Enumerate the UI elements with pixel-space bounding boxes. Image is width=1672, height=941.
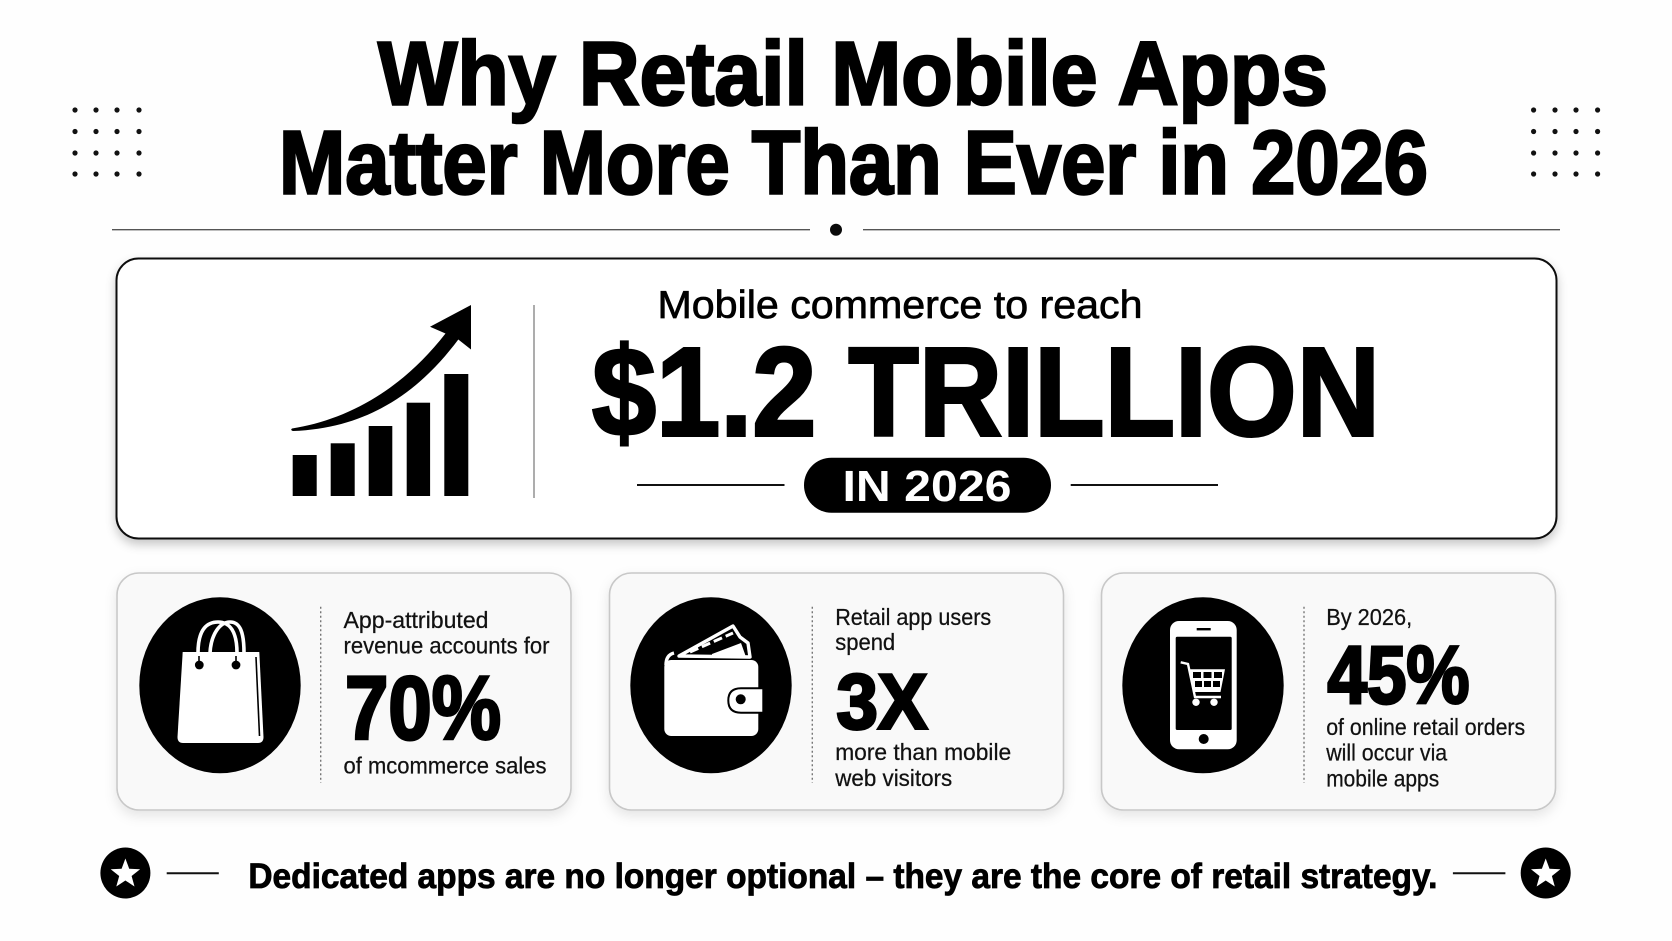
text: card 2 copy: 3X	[836, 658, 928, 746]
panel: share of online orders	[1102, 573, 1556, 810]
text: card 1 copy: 70%	[345, 659, 501, 759]
text: card 1 copy	[344, 607, 550, 778]
text: card 1 copy: App-attributed	[344, 607, 488, 633]
icon: growth bar chart with arrow	[291, 305, 471, 496]
text: mobile commerce to reach: Mobile commerce to reach	[658, 284, 1142, 327]
icon: shopping bag	[139, 597, 301, 773]
big number: $1.2 trillion: $1.2 TRILLION	[592, 322, 1380, 462]
icon: wallet	[630, 597, 792, 773]
panel: hero statistic	[116, 258, 1556, 538]
text: card 2 copy: Retail app users	[835, 604, 991, 630]
title: Why Retail Mobile Apps	[378, 24, 1328, 124]
text: card 2 copy: spend	[835, 629, 895, 655]
decorative dots: right	[1531, 107, 1600, 177]
text: card 3 copy: will occur via	[1325, 740, 1447, 766]
text: card 2 copy: web visitors	[834, 765, 952, 791]
text: card 1 copy: revenue accounts for	[344, 632, 550, 658]
decorative dots: left	[72, 107, 142, 177]
text: card 3 copy: mobile apps	[1326, 766, 1439, 792]
icon: right star badge	[1521, 848, 1571, 898]
text: card 2 copy	[834, 604, 1011, 791]
badge: in 2026: IN 2026	[842, 462, 1012, 511]
closing statement: Dedicated apps are no longer optional – they are the core of retail strategy.	[248, 857, 1437, 896]
text: card 3 copy: 45%	[1328, 630, 1470, 721]
text: card 3 copy: By 2026,	[1326, 604, 1412, 630]
panel: retail app users spend	[610, 573, 1064, 810]
text: card 3 copy: of online retail orders	[1326, 714, 1525, 740]
icon: left star badge	[100, 848, 150, 898]
icon: phone with shopping cart	[1122, 597, 1284, 773]
text: card 2 copy: more than mobile	[835, 739, 1011, 765]
badge: in 2026	[804, 458, 1051, 513]
text: card 1 copy: of mcommerce sales	[344, 752, 546, 778]
title: Matter More Than Ever in 2026	[279, 114, 1428, 214]
text: card 3 copy	[1325, 604, 1525, 792]
panel: app-attributed revenue	[117, 573, 571, 810]
title	[279, 24, 1428, 214]
